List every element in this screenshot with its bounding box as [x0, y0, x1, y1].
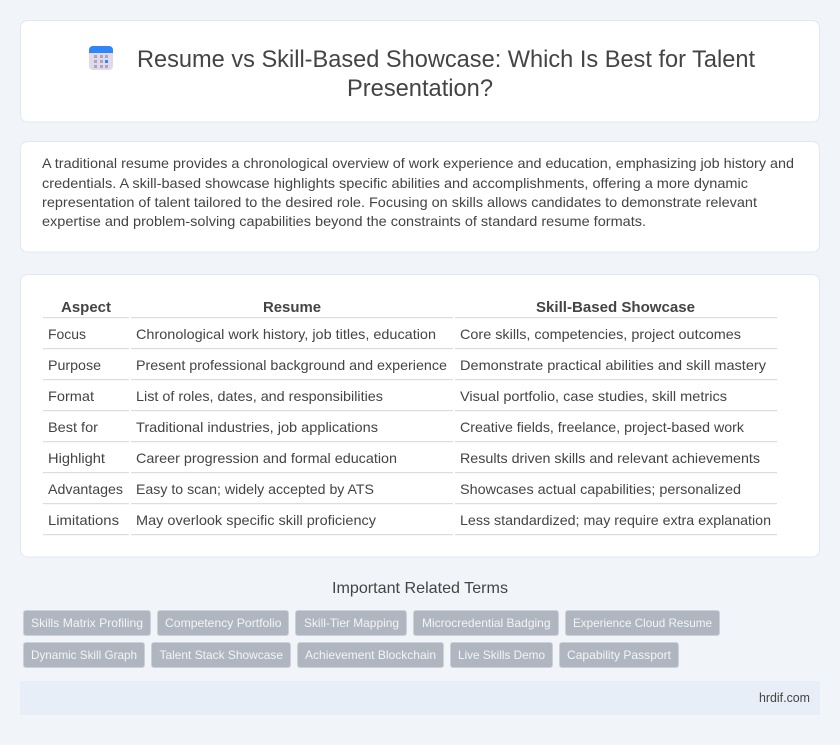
tag: competency portfolio: [158, 610, 288, 636]
row: purpose: Purpose: [48, 357, 101, 373]
row: format: List of roles, dates, and responsibilities: [136, 388, 383, 404]
row: limitations: Less standardized; may require extra explanation: [460, 512, 771, 528]
row: best for: [48, 419, 745, 435]
row: advantages: Showcases actual capabilities; personalized: [460, 481, 741, 497]
row: highlight: Results driven skills and relevant achievements: [460, 450, 760, 466]
row: advantages: [48, 481, 741, 497]
row: highlight: Highlight: [48, 450, 105, 466]
panel: header: [20, 20, 820, 122]
tag: experience cloud resume: Experience Cloud Resume: [573, 616, 712, 630]
footer: [20, 681, 820, 715]
tag: achievement blockchain: [298, 642, 444, 668]
row: focus: Focus: [48, 326, 86, 342]
row: format: Format: [48, 388, 94, 404]
row: best for: Traditional industries, job applications: [136, 419, 378, 435]
tag: live skills demo: [450, 642, 552, 668]
tag: skill-tier mapping: Skill-Tier Mapping: [304, 616, 399, 630]
row: best for: Best for: [48, 419, 98, 435]
heading: important related terms: Important Related Terms: [332, 580, 508, 597]
related term tags: [24, 610, 720, 668]
table header: Skill-Based Showcase: [536, 300, 695, 316]
row: highlight: Career progression and formal education: [136, 450, 397, 466]
tag: achievement blockchain: Achievement Blockchain: [305, 648, 436, 662]
title: Presentation?: [347, 75, 493, 102]
panel: comparison table: [20, 274, 820, 557]
tag: dynamic skill graph: [24, 642, 144, 668]
row: highlight: [48, 450, 760, 466]
tag: talent stack showcase: Talent Stack Showcase: [160, 648, 283, 662]
tag: skills matrix profiling: [24, 610, 150, 636]
row: limitations: [48, 512, 771, 528]
panel: intro paragraph: A traditional resume provides a chronological overview of work experience and education, emphasizing job history and: [42, 155, 794, 171]
panel: intro paragraph: credentials. A skill-based showcase highlights specific abilities and accomplishments, offering a more dynamic: [42, 175, 748, 191]
panel: intro paragraph: representation of talent tailored to the desired role. Focusing on skills allows candidates to demonstrate relevant: [42, 194, 757, 210]
row: focus: Core skills, competencies, project outcomes: [460, 326, 741, 342]
footer: hrdif.com: [759, 690, 810, 705]
row: format: [48, 388, 727, 404]
tag: skill-tier mapping: [296, 610, 406, 636]
tag: microcredential badging: Microcredential Badging: [422, 616, 550, 630]
tag: competency portfolio: Competency Portfolio: [165, 616, 282, 630]
table header: Resume: [263, 300, 321, 316]
row: focus: Chronological work history, job titles, education: [136, 326, 436, 342]
tag: microcredential badging: [414, 610, 558, 636]
row: limitations: Limitations: [48, 512, 119, 528]
tag: capability passport: Capability Passport: [567, 648, 672, 662]
panel: intro paragraph: [20, 142, 820, 252]
title: Resume vs Skill-Based Showcase: Which Is Best for Talent: [137, 46, 755, 73]
tag: capability passport: [560, 642, 678, 668]
panel: intro paragraph: expertise and problem-solving capabilities beyond the constraints of standard resume formats.: [42, 213, 646, 229]
table header: Aspect: [61, 300, 111, 316]
tag: talent stack showcase: [152, 642, 290, 668]
tag: experience cloud resume: [566, 610, 720, 636]
title: [137, 46, 755, 102]
table header: [61, 300, 695, 316]
tag: dynamic skill graph: Dynamic Skill Graph: [31, 648, 137, 662]
icon: calendar: [89, 46, 113, 70]
row: purpose: [48, 357, 766, 373]
row: advantages: Advantages: [48, 481, 123, 497]
tag: skills matrix profiling: Skills Matrix Profiling: [31, 616, 143, 630]
row: advantages: Easy to scan; widely accepted by ATS: [136, 481, 374, 497]
row: limitations: May overlook specific skill proficiency: [136, 512, 376, 528]
row: format: Visual portfolio, case studies, skill metrics: [460, 388, 727, 404]
row: purpose: Demonstrate practical abilities and skill mastery: [460, 357, 766, 373]
row: focus: [48, 326, 741, 342]
row: best for: Creative fields, freelance, project-based work: [460, 419, 745, 435]
tag: live skills demo: Live Skills Demo: [458, 648, 545, 662]
row: purpose: Present professional background and experience: [136, 357, 447, 373]
